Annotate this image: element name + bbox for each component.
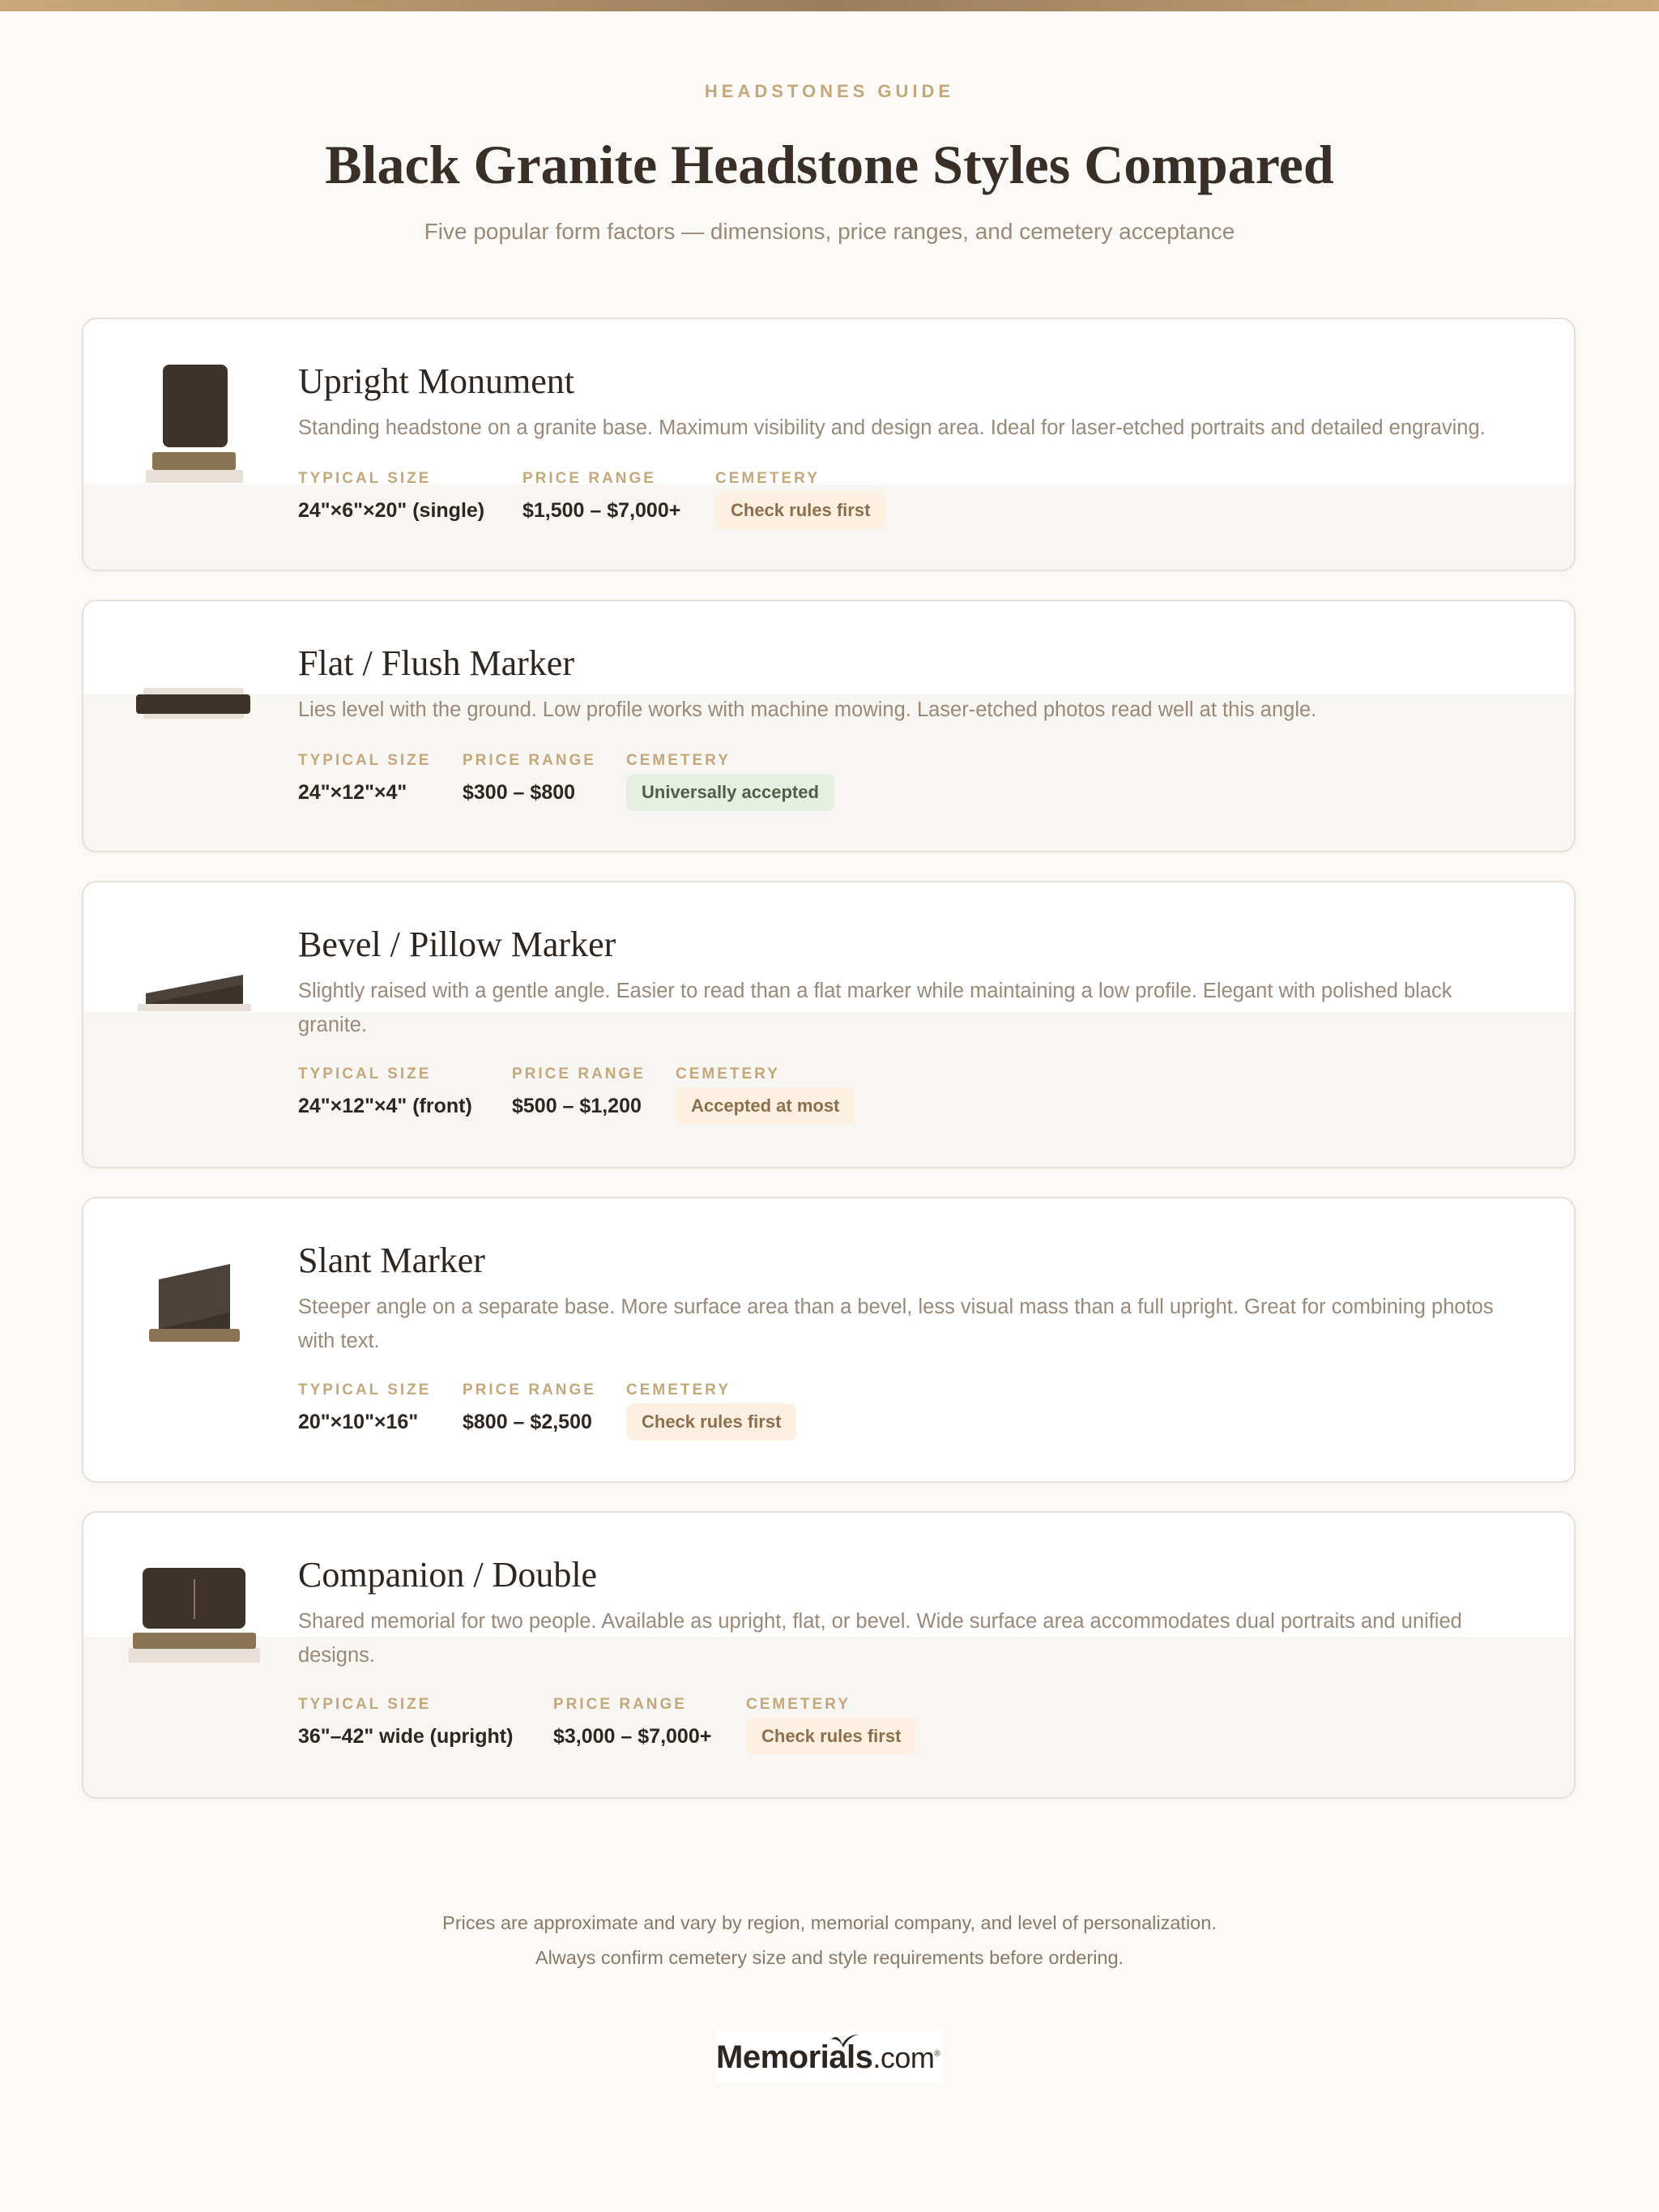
description: Lies level with the ground. Low profile works with machine mowing. Laser-etched photos read well at this angle. [298,698,1316,721]
footnote: Always confirm cemetery size and style requirements before ordering. [535,1947,1124,1968]
title: Black Granite Headstone Styles Compared [325,134,1334,195]
specs [298,1696,916,1755]
specs: Universally accepted [642,782,819,802]
logo: Memorials.com® [716,2039,940,2075]
specs: 24"×12"×4" [298,781,407,804]
icon: companion stone [129,1568,260,1663]
specs: Check rules first [761,1726,901,1746]
specs: 24"×6"×20" (single) [298,499,484,522]
heading: Bevel / Pillow Marker [298,925,616,964]
specs: $1,500 – $7,000+ [522,499,680,522]
footnote: Prices are approximate and vary by region, memorial company, and level of personalization. [442,1912,1217,1933]
specs: Accepted at most [691,1095,839,1116]
logo [716,2030,943,2082]
icon: flat marker [136,688,250,719]
specs: Check rules first [731,500,870,520]
specs: PRICE RANGE [553,1696,687,1713]
specs: TYPICAL SIZE [298,470,431,487]
specs: $800 – $2,500 [463,1411,592,1433]
specs: 36"–42" wide (upright) [298,1725,513,1748]
specs: TYPICAL SIZE [298,1065,431,1083]
specs: CEMETERY [715,470,820,487]
heading: Companion / Double [298,1555,597,1595]
icon: upright stone [146,365,243,483]
specs: $3,000 – $7,000+ [553,1725,711,1748]
specs: $300 – $800 [463,781,575,804]
eyebrow: HEADSTONES GUIDE [705,81,954,101]
specs [298,470,885,529]
description: Slightly raised with a gentle angle. Easier to read than a flat marker while maintaining a low profile. Elegant with polished black granite. [298,980,1452,1036]
icon: bird [831,2035,859,2048]
heading: Flat / Flush Marker [298,643,574,683]
specs: CEMETERY [626,752,731,769]
specs: 20"×10"×16" [298,1411,418,1433]
top bar [0,0,1659,11]
panel: flat marker [82,600,1576,852]
heading: Upright Monument [298,361,574,401]
specs: CEMETERY [626,1381,731,1399]
panel: companion [82,1511,1576,1799]
specs: PRICE RANGE [463,1381,596,1399]
panel: bevel marker [82,881,1576,1168]
icon: slant marker [149,1264,240,1342]
icon: bevel marker [138,975,251,1011]
specs: PRICE RANGE [522,470,656,487]
subtitle: Five popular form factors — dimensions, price ranges, and cemetery acceptance [424,219,1235,244]
specs: PRICE RANGE [512,1065,646,1083]
specs [298,1065,855,1125]
description: Standing headstone on a granite base. Maximum visibility and design area. Ideal for laser-etched portraits and detailed engraving. [298,416,1486,439]
specs: Check rules first [642,1411,781,1432]
specs [298,752,834,811]
specs [298,1381,796,1441]
panel: upright monument [82,318,1576,571]
heading: Slant Marker [298,1241,485,1280]
specs: TYPICAL SIZE [298,1696,431,1713]
specs: PRICE RANGE [463,752,596,769]
specs: 24"×12"×4" (front) [298,1095,472,1117]
panel: slant marker [82,1197,1576,1483]
footnote [442,1912,1217,1968]
specs: $500 – $1,200 [512,1095,642,1117]
specs: TYPICAL SIZE [298,752,431,769]
specs: CEMETERY [676,1065,780,1083]
specs: CEMETERY [746,1696,851,1713]
description: Steeper angle on a separate base. More surface area than a bevel, less visual mass than a full upright. Great for combining photos with text. [298,1296,1494,1352]
specs: TYPICAL SIZE [298,1381,431,1399]
description: Shared memorial for two people. Available as upright, flat, or bevel. Wide surface area accommodates dual portraits and unified designs. [298,1610,1462,1667]
